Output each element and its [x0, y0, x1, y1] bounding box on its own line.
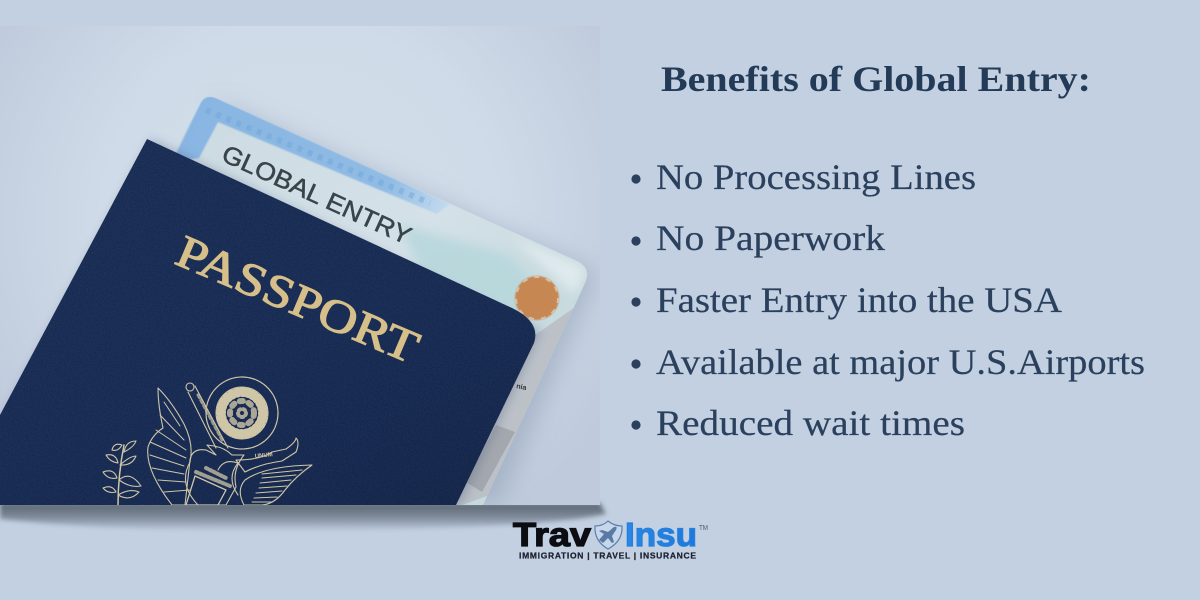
dark lower grey strip [466, 425, 515, 492]
border weave pattern [206, 110, 430, 203]
logo: TravInsu [513, 516, 708, 560]
passport cover shadow [4, 139, 541, 505]
list item: no paperwork: No Paperwork [656, 218, 885, 258]
icon: shield with plane [595, 521, 622, 549]
list item: no processing lines: No Processing Lines [656, 157, 976, 197]
right wing and banner [236, 438, 312, 505]
left wing [148, 383, 228, 505]
olive branch [103, 441, 141, 505]
card small text: nia [516, 383, 527, 392]
card heading: GLOBAL ENTRY [218, 140, 416, 251]
cover fill [0, 130, 560, 510]
PASSPORT title: PASSPORT [169, 225, 427, 373]
list item: reduced wait times: Reduced wait times [656, 403, 965, 443]
logo tagline: IMMIGRATION | TRAVEL | INSURANCE [519, 550, 696, 560]
logo word: Trav: Trav [513, 516, 592, 553]
orange card seal [515, 276, 559, 320]
logo word: Insu: Insu [625, 516, 697, 553]
photo drop shadow [0, 503, 606, 532]
card face [218, 124, 588, 505]
lower grey strip [456, 308, 573, 505]
benefits list [631, 157, 1145, 443]
list item: available at airports: Available at major U.S.Airports [656, 342, 1145, 382]
trademark: TM [699, 525, 708, 532]
card shadow [215, 102, 596, 505]
teal card panel [402, 226, 530, 312]
heading: Benefits of Global Entry: [661, 59, 1091, 99]
list item: faster entry: Faster Entry into the USA [656, 280, 1062, 320]
right wing and banner: UNUM [255, 452, 273, 460]
white corner highlight [525, 244, 586, 292]
eagle body and shield [185, 445, 244, 505]
star cloud seal [206, 377, 278, 449]
blue card border [172, 97, 450, 214]
leather grain [0, 130, 560, 510]
photo: passport with Global Entry card [0, 26, 600, 510]
passport cover [0, 130, 560, 510]
photo background [0, 26, 600, 505]
eagle seal emblem [103, 377, 312, 505]
Global Entry card [160, 90, 600, 510]
